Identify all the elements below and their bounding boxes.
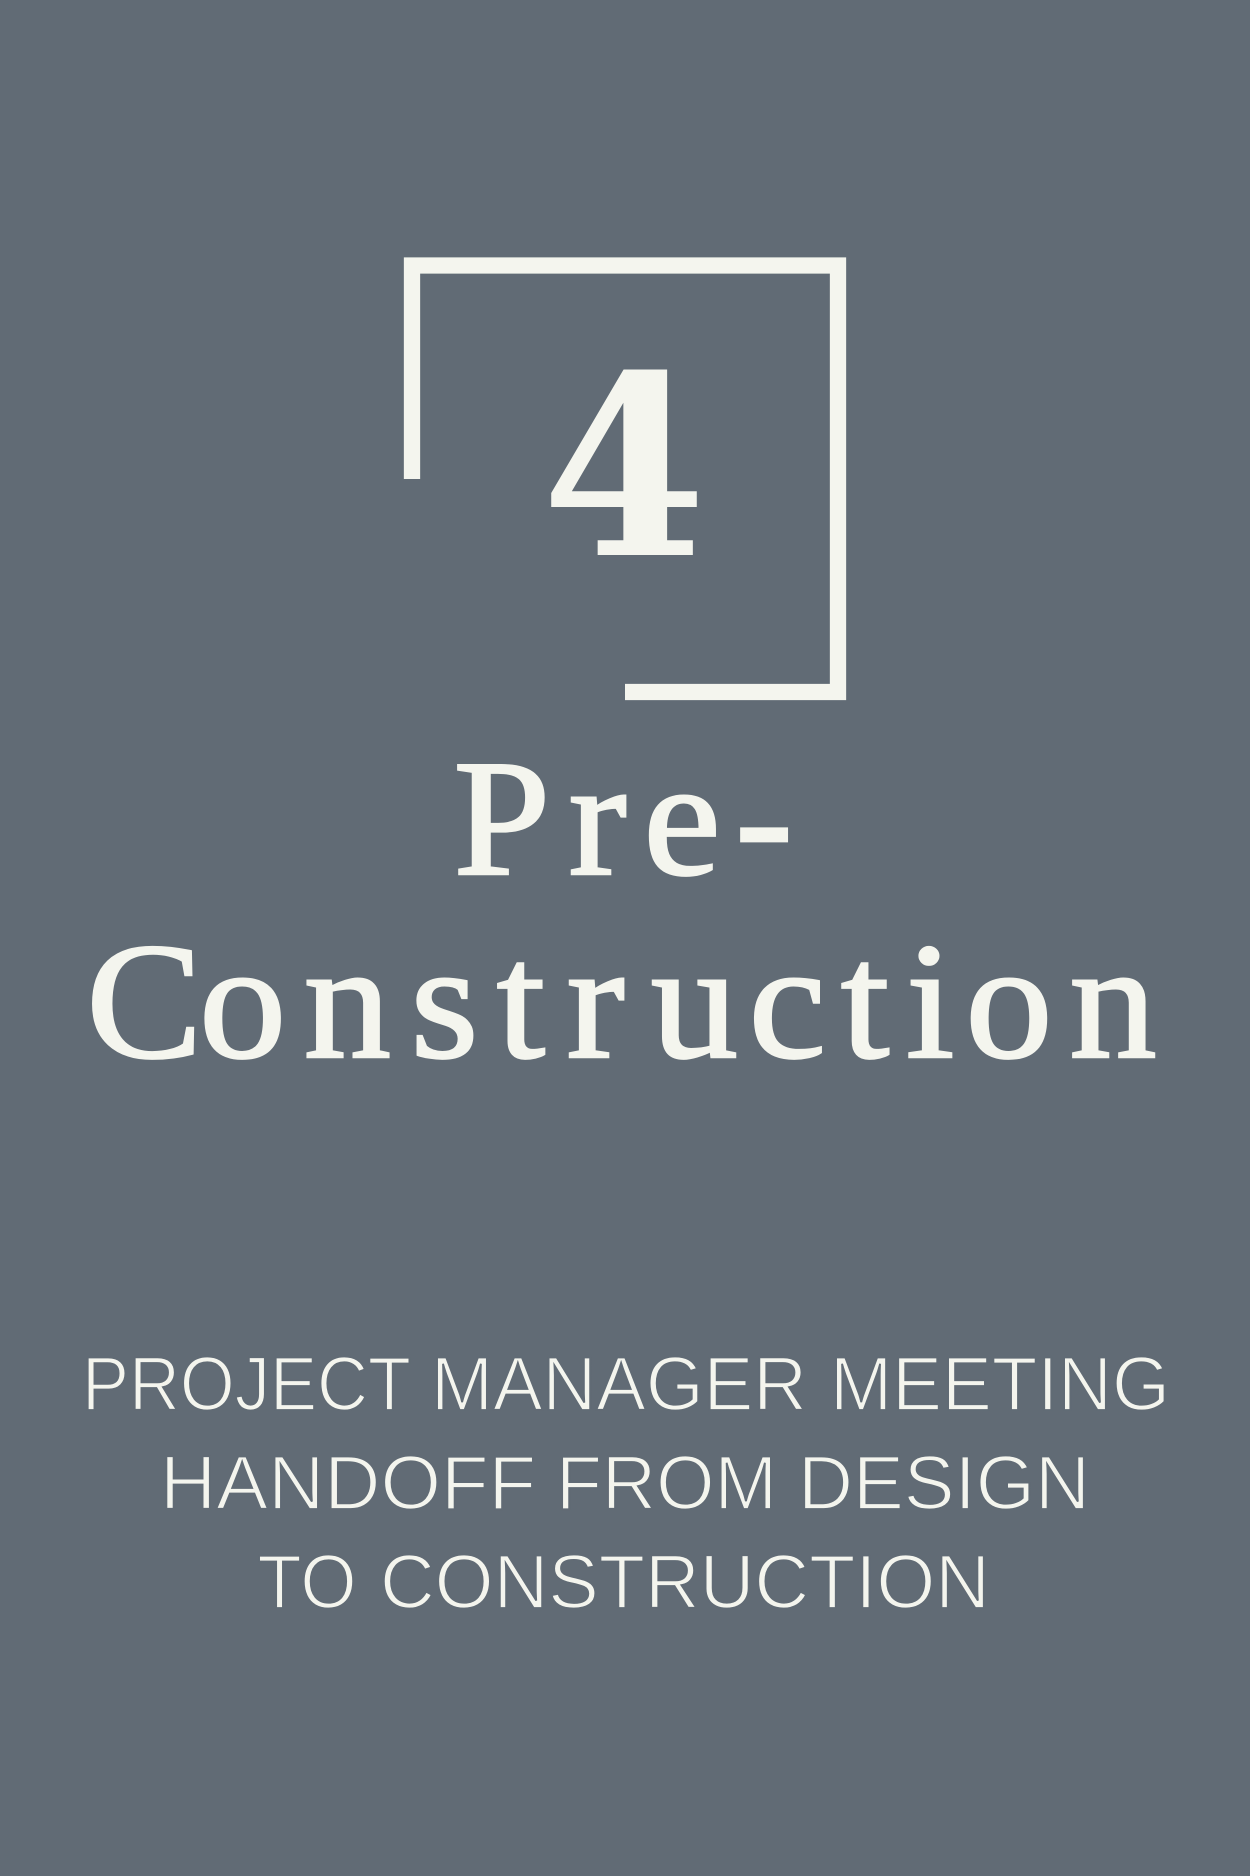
- description text: CONSTRUCTION: [380, 1540, 990, 1625]
- description text: HANDOFF: [160, 1441, 536, 1526]
- description text: [82, 1342, 1170, 1625]
- description text: TO: [258, 1540, 356, 1625]
- title: Construction: [86, 909, 1157, 1093]
- description text: PROJECT: [82, 1342, 411, 1427]
- description text: MANAGER: [431, 1342, 807, 1427]
- description text: FROM: [556, 1441, 777, 1526]
- title: Pre-: [453, 726, 793, 910]
- title: [86, 726, 1157, 1093]
- step number: 4: [542, 320, 706, 614]
- description text: DESIGN: [798, 1441, 1090, 1526]
- description text: MEETING: [830, 1342, 1170, 1427]
- icon: square bracket frame: [412, 266, 838, 692]
